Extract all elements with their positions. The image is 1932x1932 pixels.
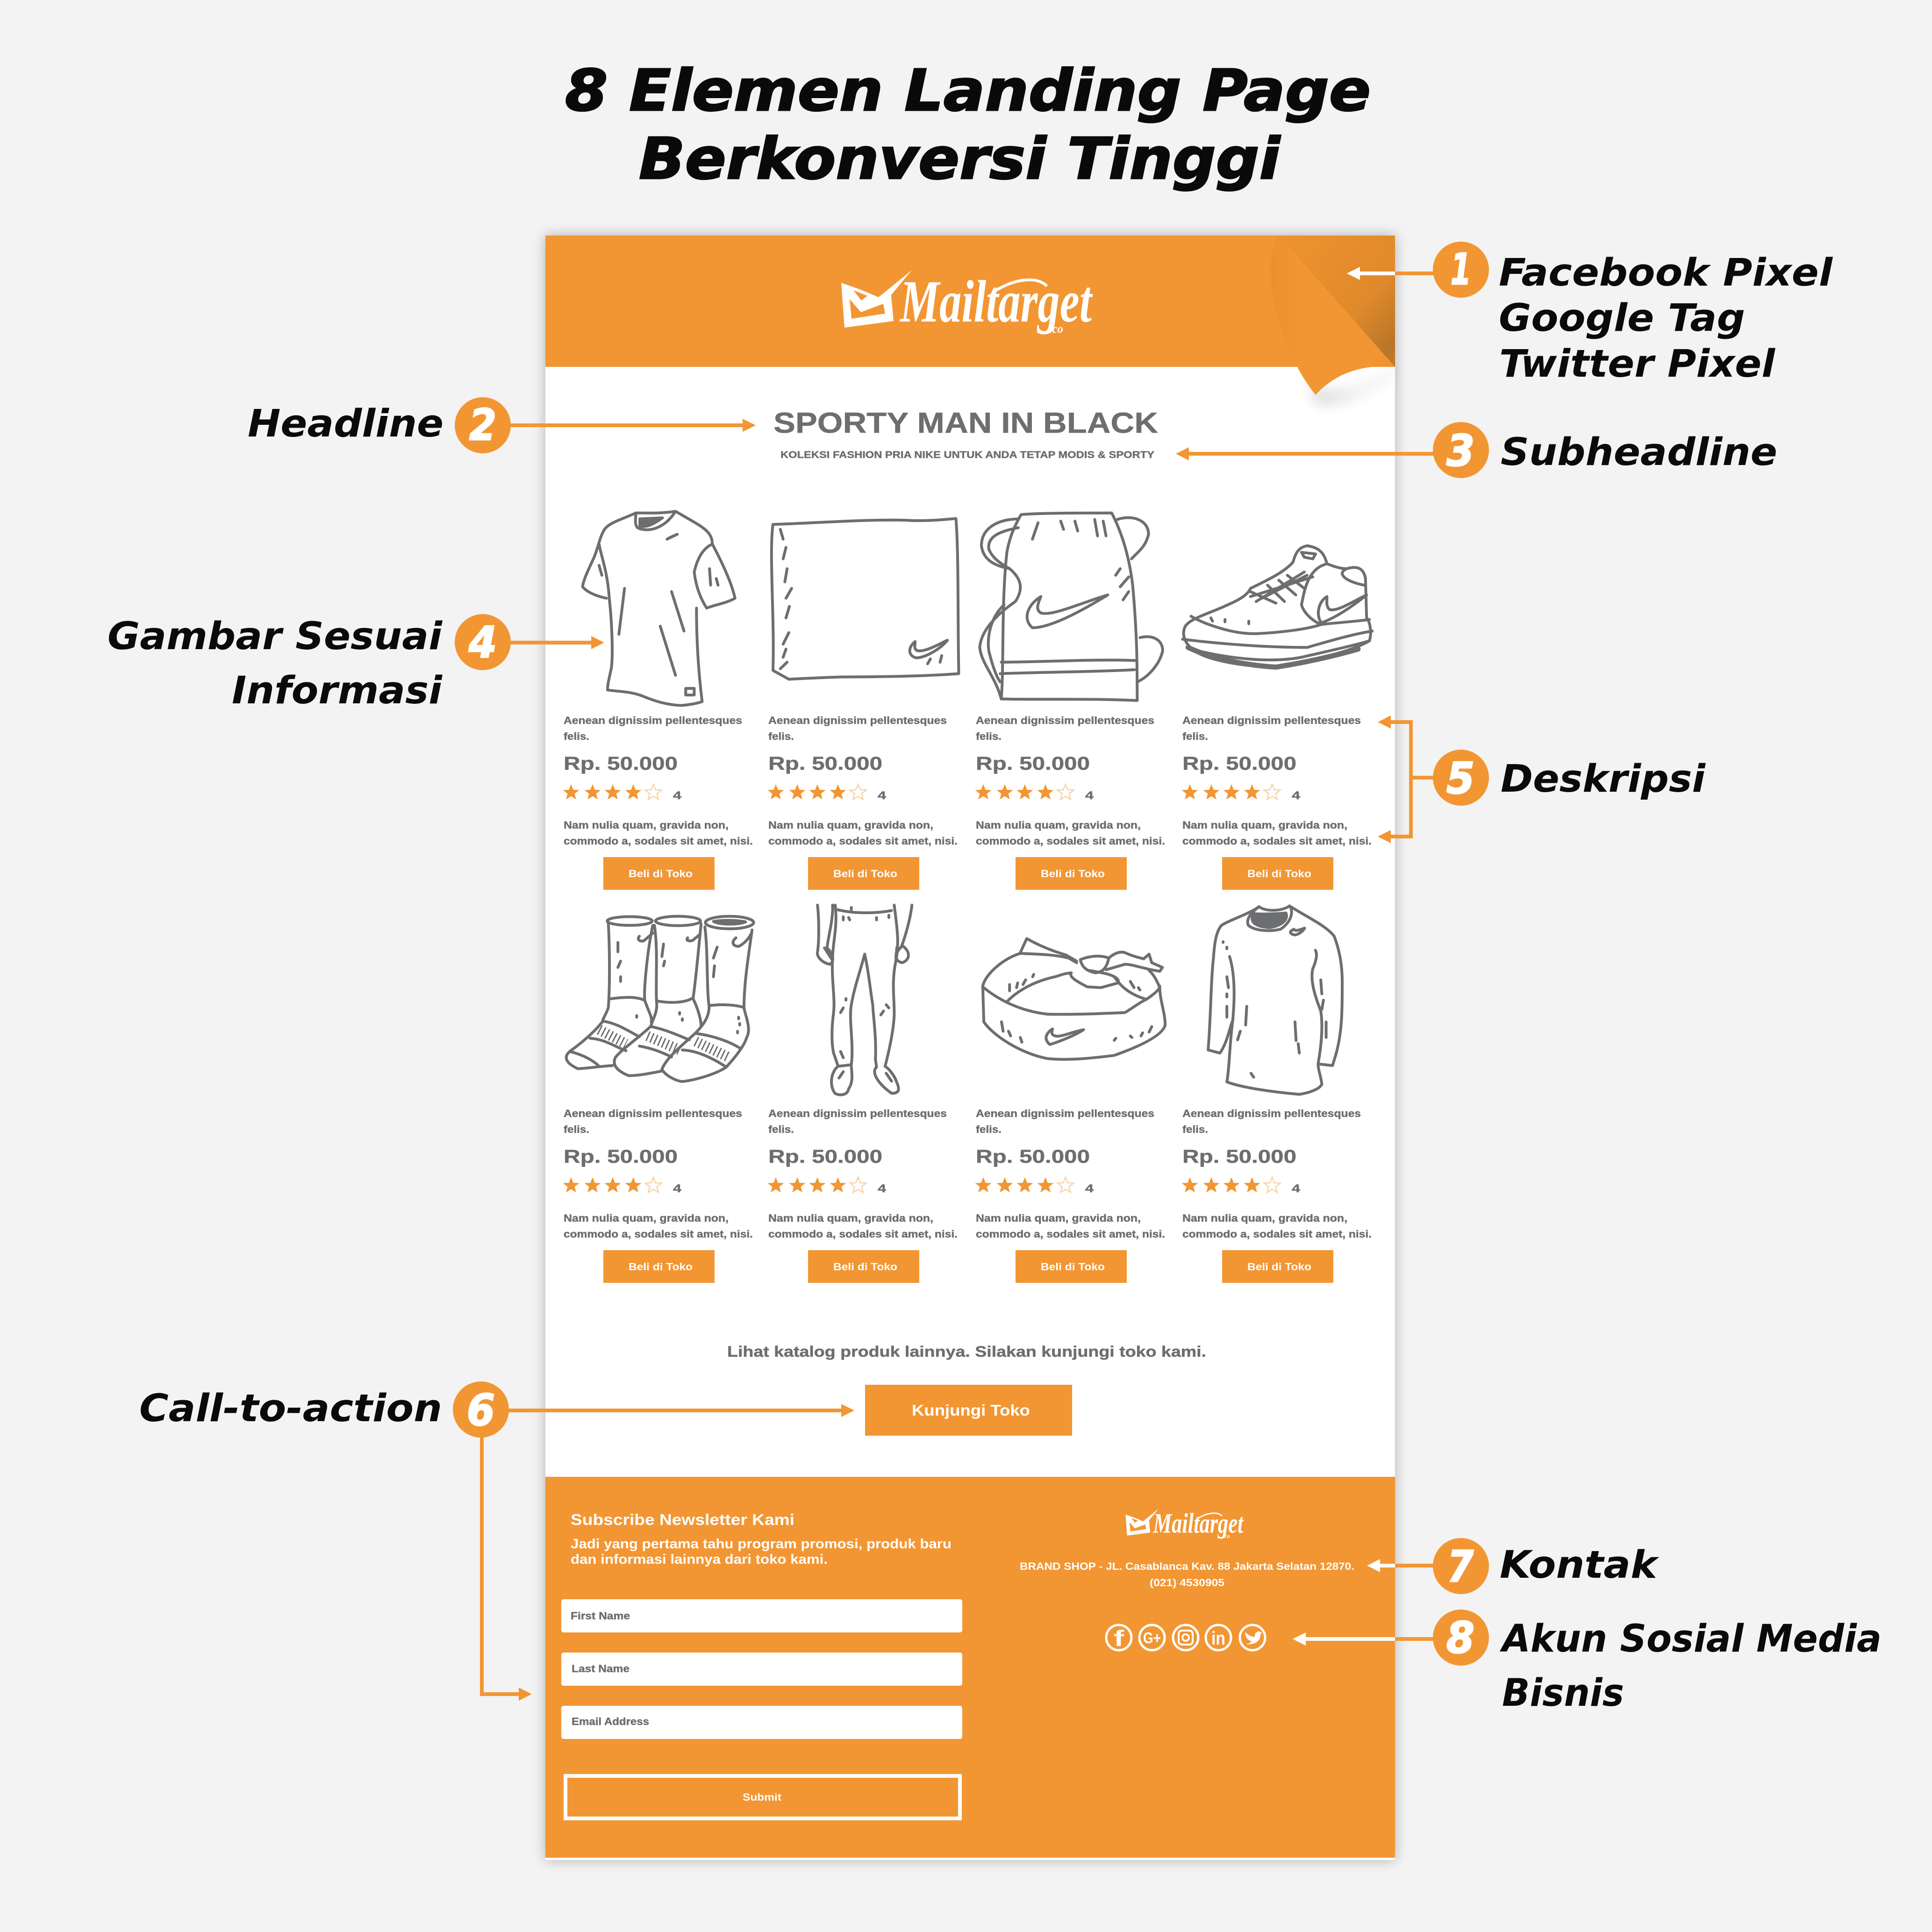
newsletter description: dan informasi lainnya dari toko kami. [571, 1552, 828, 1567]
callout 6: 6 [467, 1385, 495, 1435]
product text: Rp. 50.000 [564, 1146, 678, 1167]
product text: commodo a, sodales sit amet, nisi. [976, 835, 1165, 847]
product text: felis. [1182, 730, 1208, 742]
product card: drawstring bag [975, 513, 1165, 890]
product text [975, 1108, 1165, 1283]
contact address: BRAND SHOP - JL. Casablanca Kav. 88 Jakarta Selatan 12870. [1020, 1560, 1354, 1572]
product text: Aenean dignissim pellentesques [768, 1108, 947, 1119]
callout 4: 4 [468, 617, 497, 667]
newsletter description [571, 1537, 952, 1567]
product text: 4 [878, 789, 887, 802]
product text: Nam nulia quam, gravida non, [1182, 1212, 1347, 1224]
callout 7: 7 [1447, 1542, 1474, 1592]
product text: Beli di Toko [1041, 1261, 1105, 1273]
callout 2: Headline [248, 402, 444, 446]
callout 2 [248, 397, 511, 453]
product text [767, 715, 958, 890]
icon: drawstring bag [980, 513, 1163, 701]
newsletter heading: Subscribe Newsletter Kami [571, 1511, 794, 1528]
submit button: Submit [743, 1791, 782, 1803]
arrow: 6 to call-to-action button and form [482, 1404, 854, 1701]
title: 8 Elemen Landing Page [565, 57, 1371, 124]
callout 1: Google Tag [1499, 296, 1745, 340]
product text: 4 [878, 1182, 887, 1195]
social icons [1106, 1625, 1265, 1651]
product text [563, 1108, 753, 1283]
callout 2: 2 [469, 400, 496, 450]
arrow: 4 to product image [509, 636, 604, 649]
product text: Nam nulia quam, gravida non, [768, 819, 933, 831]
product text: Nam nulia quam, gravida non, [976, 1212, 1141, 1224]
callout 5: Deskripsi [1501, 757, 1706, 801]
input: last name [561, 1653, 962, 1686]
product text: Nam nulia quam, gravida non, [564, 819, 729, 831]
headline: SPORTY MAN IN BLACK [773, 407, 1158, 439]
callout 3: 3 [1446, 426, 1474, 476]
logo: Mailtarget footer: Mailtarget [1153, 1508, 1244, 1539]
callout 1: Facebook Pixel [1499, 251, 1833, 295]
arrow: 1 to page curl [1347, 267, 1435, 280]
call-to-action button: Kunjungi Toko [912, 1402, 1030, 1419]
logo: Mailtarget header: Mailtarget [900, 268, 1093, 335]
product text: Nam nulia quam, gravida non, [1182, 819, 1347, 831]
product text: felis. [564, 1123, 589, 1135]
product text: Beli di Toko [1247, 1261, 1311, 1273]
icon: facebook: f [1114, 1626, 1124, 1651]
product text: commodo a, sodales sit amet, nisi. [768, 835, 958, 847]
input: first name [561, 1599, 962, 1632]
product card: socks [563, 916, 754, 1283]
input: email [561, 1706, 962, 1739]
arrow: 5 bracket to description [1378, 716, 1434, 843]
icon: tights [817, 905, 912, 1095]
callout 4 [107, 614, 511, 713]
logo: Mailtarget header [841, 268, 1093, 336]
icon: towel [772, 519, 959, 679]
callout 7 [1433, 1538, 1659, 1594]
panel: landing page mockup [545, 236, 1395, 1860]
callout 8: 8 [1446, 1613, 1474, 1663]
icon: socks [566, 916, 754, 1081]
product text: Nam nulia quam, gravida non, [564, 1212, 729, 1224]
title: Berkonversi Tinggi [639, 126, 1281, 192]
callout 3: Subheadline [1501, 430, 1777, 474]
icon: linkedin [1206, 1625, 1231, 1650]
product text: commodo a, sodales sit amet, nisi. [564, 1228, 753, 1240]
product text: 4 [673, 789, 682, 802]
product text: Rp. 50.000 [976, 1146, 1090, 1167]
icon: linkedin: in [1211, 1628, 1225, 1649]
product text: 4 [1085, 1182, 1094, 1195]
icon: long sleeve shirt [1208, 906, 1342, 1095]
icon: google plus: G+ [1143, 1629, 1161, 1646]
icon: headband [983, 938, 1165, 1059]
callout 3 [1433, 422, 1777, 478]
product text: 4 [1292, 789, 1301, 802]
product text: Beli di Toko [833, 1261, 897, 1273]
product card: towel [767, 519, 959, 890]
product text: Nam nulia quam, gravida non, [768, 1212, 933, 1224]
product card: sneaker [1181, 546, 1372, 890]
product text: Rp. 50.000 [1182, 753, 1296, 774]
product card: headband [975, 938, 1165, 1283]
subheadline: KOLEKSI FASHION PRIA NIKE UNTUK ANDA TETAP MODIS & SPORTY [780, 450, 1154, 460]
product text: 4 [673, 1182, 682, 1195]
callout 6 [139, 1381, 509, 1438]
title [565, 57, 1371, 192]
logo: Mailtarget header: .co [1049, 322, 1063, 336]
product text [563, 715, 753, 890]
product text [975, 715, 1165, 890]
product text: commodo a, sodales sit amet, nisi. [564, 835, 753, 847]
input: email: Email Address [572, 1716, 649, 1727]
product text: Aenean dignissim pellentesques [768, 715, 947, 726]
product text: Aenean dignissim pellentesques [564, 715, 742, 726]
logo: Mailtarget footer [1125, 1508, 1244, 1539]
product card: long sleeve shirt [1181, 906, 1372, 1283]
icon: sneaker [1182, 546, 1372, 667]
product text: felis. [976, 1123, 1002, 1135]
product text: Aenean dignissim pellentesques [564, 1108, 742, 1119]
icon: twitter [1240, 1625, 1265, 1650]
panel: header banner [545, 236, 1395, 404]
product card: t-shirt [563, 511, 753, 890]
call-to-action button [865, 1385, 1072, 1436]
product text: commodo a, sodales sit amet, nisi. [1182, 835, 1372, 847]
product text: 4 [1292, 1182, 1301, 1195]
product text: Beli di Toko [629, 868, 693, 880]
product text: 4 [1085, 789, 1094, 802]
product text: felis. [1182, 1123, 1208, 1135]
product text: Aenean dignissim pellentesques [1182, 715, 1361, 726]
page curl [1270, 236, 1395, 404]
submit button [565, 1776, 960, 1818]
arrow: 7 to contact [1367, 1559, 1435, 1572]
callout 5: 5 [1446, 753, 1474, 803]
product text [1181, 715, 1372, 890]
product text: Beli di Toko [629, 1261, 693, 1273]
callout 4: Informasi [232, 669, 443, 713]
callout 8 [1433, 1610, 1882, 1715]
product text: felis. [564, 730, 589, 742]
arrow: 8 to social icons [1293, 1632, 1435, 1646]
input: first name: First Name [571, 1610, 630, 1622]
product text: felis. [976, 730, 1002, 742]
product text [1181, 1108, 1372, 1283]
product text [767, 1108, 958, 1283]
product card: tights [767, 905, 958, 1283]
catalog prompt text: Lihat katalog produk lainnya. Silakan kunjungi toko kami. [727, 1343, 1206, 1360]
callout 8: Bisnis [1502, 1671, 1624, 1715]
callout 7: Kontak [1500, 1543, 1659, 1587]
icon: google plus [1139, 1625, 1165, 1650]
arrow: 3 to subheadline [1176, 447, 1434, 460]
product text: Aenean dignissim pellentesques [976, 715, 1154, 726]
product text: commodo a, sodales sit amet, nisi. [768, 1228, 958, 1240]
callout 4: Gambar Sesuai [107, 615, 443, 658]
product text: Rp. 50.000 [1182, 1146, 1296, 1167]
product text: Rp. 50.000 [976, 753, 1090, 774]
product text: Beli di Toko [1247, 868, 1311, 880]
icon: t-shirt [583, 511, 735, 706]
panel: footer [545, 1477, 1395, 1858]
input: last name: Last Name [572, 1663, 630, 1674]
callout 5 [1433, 750, 1706, 806]
product text: Beli di Toko [1041, 868, 1105, 880]
icon: instagram [1173, 1625, 1198, 1650]
product text: Nam nulia quam, gravida non, [976, 819, 1141, 831]
product text: commodo a, sodales sit amet, nisi. [976, 1228, 1165, 1240]
product text: Aenean dignissim pellentesques [1182, 1108, 1361, 1119]
product text: commodo a, sodales sit amet, nisi. [1182, 1228, 1372, 1240]
logo: Mailtarget footer: .co [1224, 1533, 1230, 1539]
contact address: (021) 4530905 [1150, 1577, 1224, 1589]
contact address [1020, 1560, 1354, 1589]
product text: Rp. 50.000 [768, 1146, 882, 1167]
callout 1: 1 [1451, 244, 1471, 294]
product text: Rp. 50.000 [768, 753, 882, 774]
callout 6: Call-to-action [139, 1387, 442, 1431]
callout 1 [1433, 242, 1833, 386]
product text: Rp. 50.000 [564, 753, 678, 774]
product text: Beli di Toko [833, 868, 897, 880]
product text: Aenean dignissim pellentesques [976, 1108, 1154, 1119]
callout 8: Akun Sosial Media [1499, 1617, 1882, 1661]
arrow: 2 to headline [509, 419, 756, 432]
newsletter description: Jadi yang pertama tahu program promosi, produk baru [571, 1537, 952, 1552]
callout 1: Twitter Pixel [1499, 342, 1775, 386]
icon: facebook [1106, 1625, 1131, 1651]
product text: felis. [768, 1123, 794, 1135]
product text: felis. [768, 730, 794, 742]
